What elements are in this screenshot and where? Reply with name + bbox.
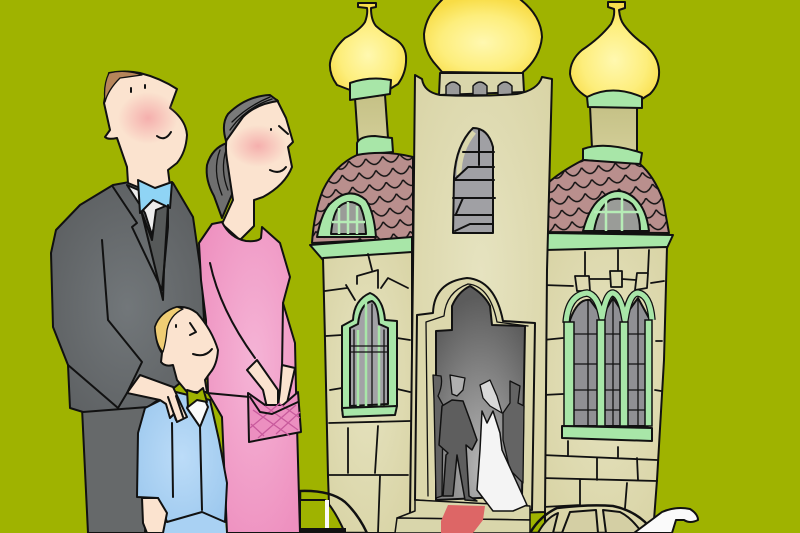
central onion dome — [424, 0, 542, 95]
bride — [477, 380, 527, 511]
man: blush — [118, 92, 178, 144]
left tiled dome — [310, 153, 413, 260]
white ribbon on car — [634, 508, 698, 533]
woman: hair — [224, 95, 278, 141]
right car — [530, 505, 654, 533]
man's hand on boy's shoulder — [127, 375, 187, 422]
man: hair — [104, 71, 142, 102]
man: bow tie — [138, 180, 172, 213]
boy: hand — [142, 498, 167, 533]
right onion dome — [570, 2, 659, 165]
woman — [199, 95, 301, 533]
boy: bow tie — [187, 388, 207, 407]
woman: dress — [199, 222, 300, 533]
right wing wall — [542, 247, 667, 533]
boy: hair — [155, 307, 183, 352]
left arched window — [342, 293, 397, 417]
right triple arched window — [562, 293, 652, 441]
man: jacket — [51, 180, 204, 412]
tower belfry window — [453, 128, 495, 233]
entrance steps — [395, 500, 530, 533]
woman: ponytail — [207, 143, 234, 218]
man: eyes and mouth — [131, 85, 171, 138]
woman: hands — [247, 360, 295, 412]
boy: trousers — [160, 510, 226, 533]
boy: shirt — [187, 398, 208, 427]
woman: neck and face — [222, 99, 293, 240]
left wing wall — [323, 252, 412, 533]
groom — [439, 375, 477, 501]
wedding guests silhouettes — [433, 375, 524, 498]
man: head — [104, 72, 187, 192]
man: lapels and sleeve lines — [68, 187, 168, 408]
boy — [137, 307, 227, 533]
woman: blush — [229, 125, 287, 167]
woman: clutch bag — [248, 392, 301, 442]
man — [51, 71, 204, 533]
man: trousers — [82, 400, 150, 533]
right tiled dome — [547, 160, 673, 252]
left onion dome — [330, 3, 406, 155]
man: shirt and tie — [127, 185, 170, 235]
boy: face — [176, 323, 212, 355]
boy: jacket — [137, 392, 227, 522]
central tower — [410, 75, 552, 516]
red carpet — [441, 505, 485, 533]
boy: head — [155, 307, 218, 392]
church — [310, 0, 673, 533]
left car — [300, 491, 367, 533]
woman: eye and mouth — [270, 126, 288, 172]
central doorway frame — [415, 278, 535, 510]
